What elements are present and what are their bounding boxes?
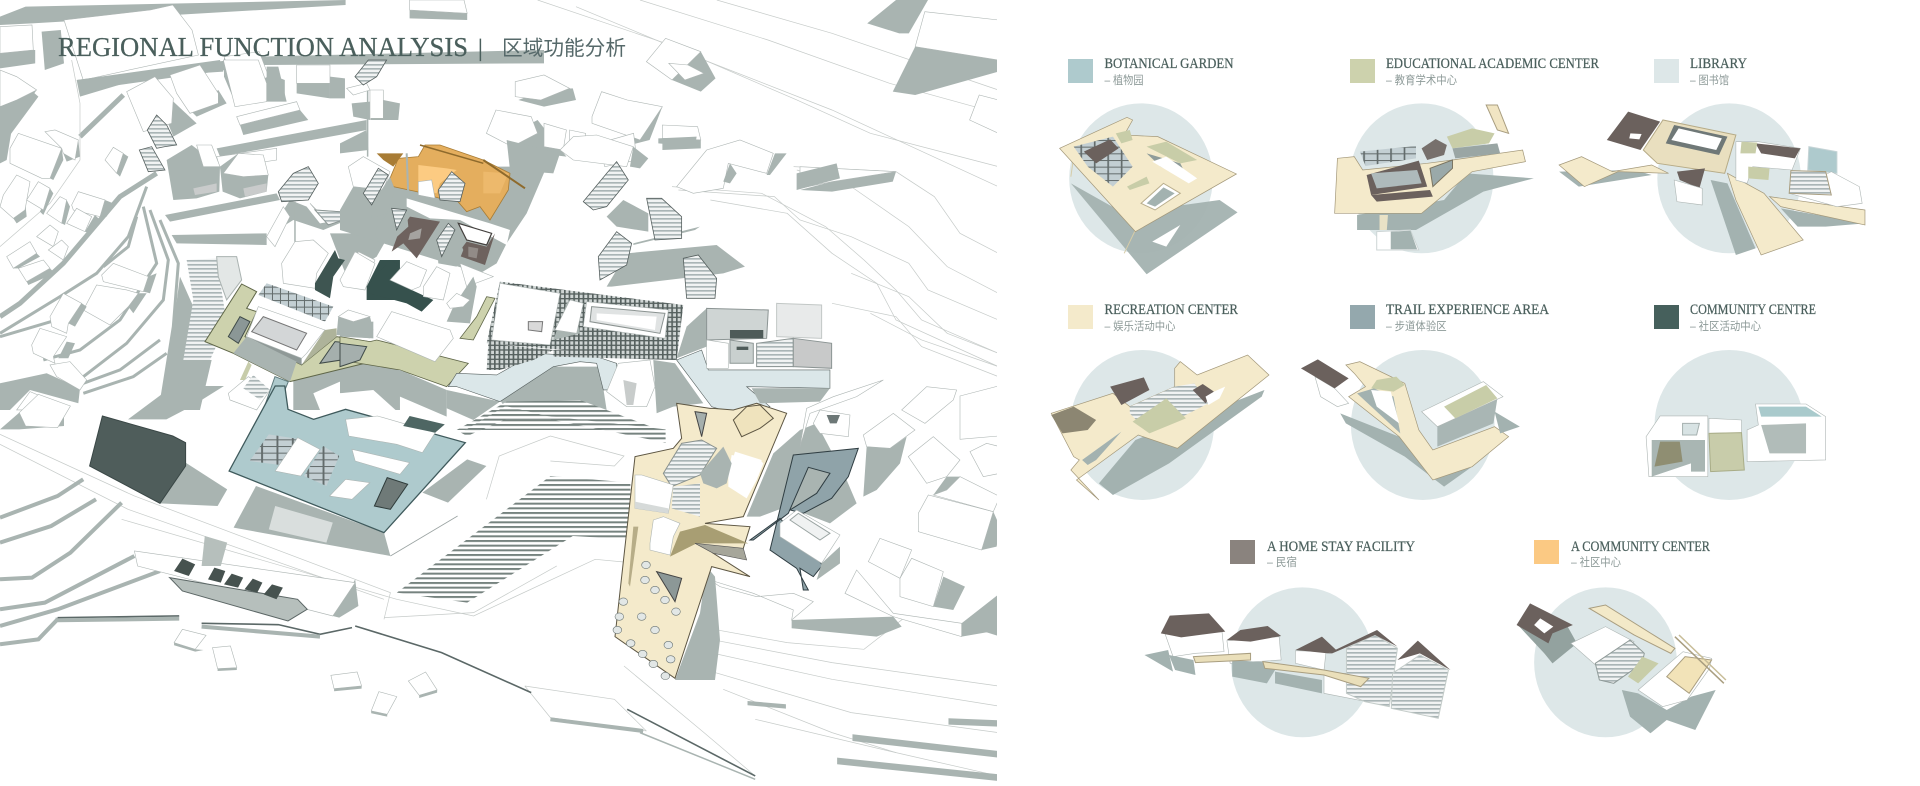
legend: botanical garden: [1068, 56, 1234, 87]
zone: trail experience (slate): [750, 448, 858, 590]
right hillside: [982, 512, 1000, 550]
panel background: right side: [997, 0, 1920, 786]
upper terrace houses: [518, 88, 576, 107]
map: contours and outer upper buildings: [0, 0, 998, 377]
map: central cluster: [340, 130, 840, 430]
legend: library: LIBRARY: [1690, 56, 1747, 72]
map: southeast cluster: [613, 380, 1000, 680]
legend: home stay facility: [1230, 539, 1415, 569]
legend: recreation center: RECREATION CENTER: [1104, 302, 1238, 318]
right hillside buildings: [960, 386, 998, 439]
legend: community center: [1534, 539, 1710, 569]
olive east arm: [460, 297, 495, 340]
legend: community centre: – 社区活动中心: [1690, 319, 1761, 333]
legend: botanical garden: BOTANICAL GARDEN: [1104, 56, 1234, 72]
legend: library: – 图书馆: [1690, 73, 1729, 87]
legend: educational academic center: EDUCATIONAL ACADEMIC CENTER: [1386, 56, 1599, 72]
map: grey below the hall: [500, 367, 607, 410]
zone: home stay (brown): [375, 208, 495, 267]
northeast pavilions: [607, 200, 648, 232]
white houses: [330, 233, 390, 277]
stairs: [397, 476, 630, 603]
panel: community centre: [1646, 302, 1826, 500]
legend: home stay facility: A HOME STAY FACILITY: [1267, 539, 1415, 555]
diagram: home stay facility: [1144, 587, 1450, 737]
diagram: botanical garden: [1060, 103, 1238, 274]
terraced contour stripes: [0, 479, 83, 518]
zone: educational academic center (olive): [205, 283, 400, 410]
map: west hillside: [0, 60, 400, 410]
top road band: [0, 0, 346, 25]
stairs centre: [457, 400, 660, 430]
zone: botanical garden (blue): [229, 386, 486, 556]
legend: recreation center: – 娱乐活动中心: [1104, 319, 1176, 333]
diagram: educational academic center: [1335, 103, 1534, 253]
legend: trail experience area: TRAIL EXPERIENCE AREA: [1386, 302, 1549, 318]
right cluster of buildings: [707, 303, 832, 368]
large hall with dark frame: [487, 282, 683, 370]
panel: recreation center: [1051, 302, 1269, 500]
icon: dark house: [90, 416, 227, 506]
diagram: library: [1559, 103, 1865, 255]
pavilion with hatched floor: [267, 200, 363, 237]
road strips: [80, 95, 123, 137]
map: lower half of site: [0, 386, 998, 781]
diagram: trail experience area: [1301, 350, 1520, 500]
legend: trail experience area: [1350, 302, 1549, 333]
legend: trail experience area: – 步道体验区: [1386, 319, 1447, 333]
legend: home stay facility: – 民宿: [1267, 555, 1297, 569]
zone: community centre (dark green): [340, 252, 433, 312]
legend: library: [1654, 56, 1747, 87]
panel: library: [1559, 56, 1865, 255]
panel: community center: [1517, 539, 1726, 737]
panel: site map: [0, 0, 1000, 781]
panel: trail experience area: [1301, 302, 1549, 500]
legend: recreation center: [1068, 302, 1238, 333]
cluster houses: [50, 148, 63, 180]
stair tower: [183, 258, 227, 360]
legend: educational academic center: [1350, 56, 1599, 87]
zone: library (pale blue): [448, 350, 830, 413]
small plinths: [174, 629, 206, 649]
grey south of zone: [675, 567, 720, 680]
panel: home stay facility: [1144, 539, 1450, 737]
legend: community center: A COMMUNITY CENTER: [1571, 539, 1710, 555]
top right block: [867, 0, 928, 33]
legend: botanical garden: – 植物园: [1104, 73, 1144, 87]
title: 区域功能分析: [502, 37, 626, 60]
cafe tables: [613, 561, 680, 680]
diagram: community center: [1517, 587, 1726, 737]
diagram: community centre: [1646, 350, 1826, 500]
panel: educational academic center: [1335, 56, 1599, 253]
zone: recreation center (yellow): [613, 403, 787, 680]
diagram: recreation center: [1051, 350, 1269, 500]
bus stop row: [134, 536, 358, 621]
legend: community centre: COMMUNITY CENTRE: [1690, 302, 1816, 318]
title: REGIONAL FUNCTION ANALYSIS: [58, 32, 468, 62]
legend: community center: – 社区中心: [1571, 555, 1621, 569]
edge walls: [58, 616, 179, 618]
legend: educational academic center: – 教育学术中心: [1386, 73, 1457, 87]
zone: community center (orange): [377, 145, 525, 220]
title: |: [478, 36, 483, 62]
legend: community centre: [1654, 302, 1816, 333]
panel: botanical garden: [1060, 56, 1238, 274]
terrace houses: [165, 193, 280, 222]
